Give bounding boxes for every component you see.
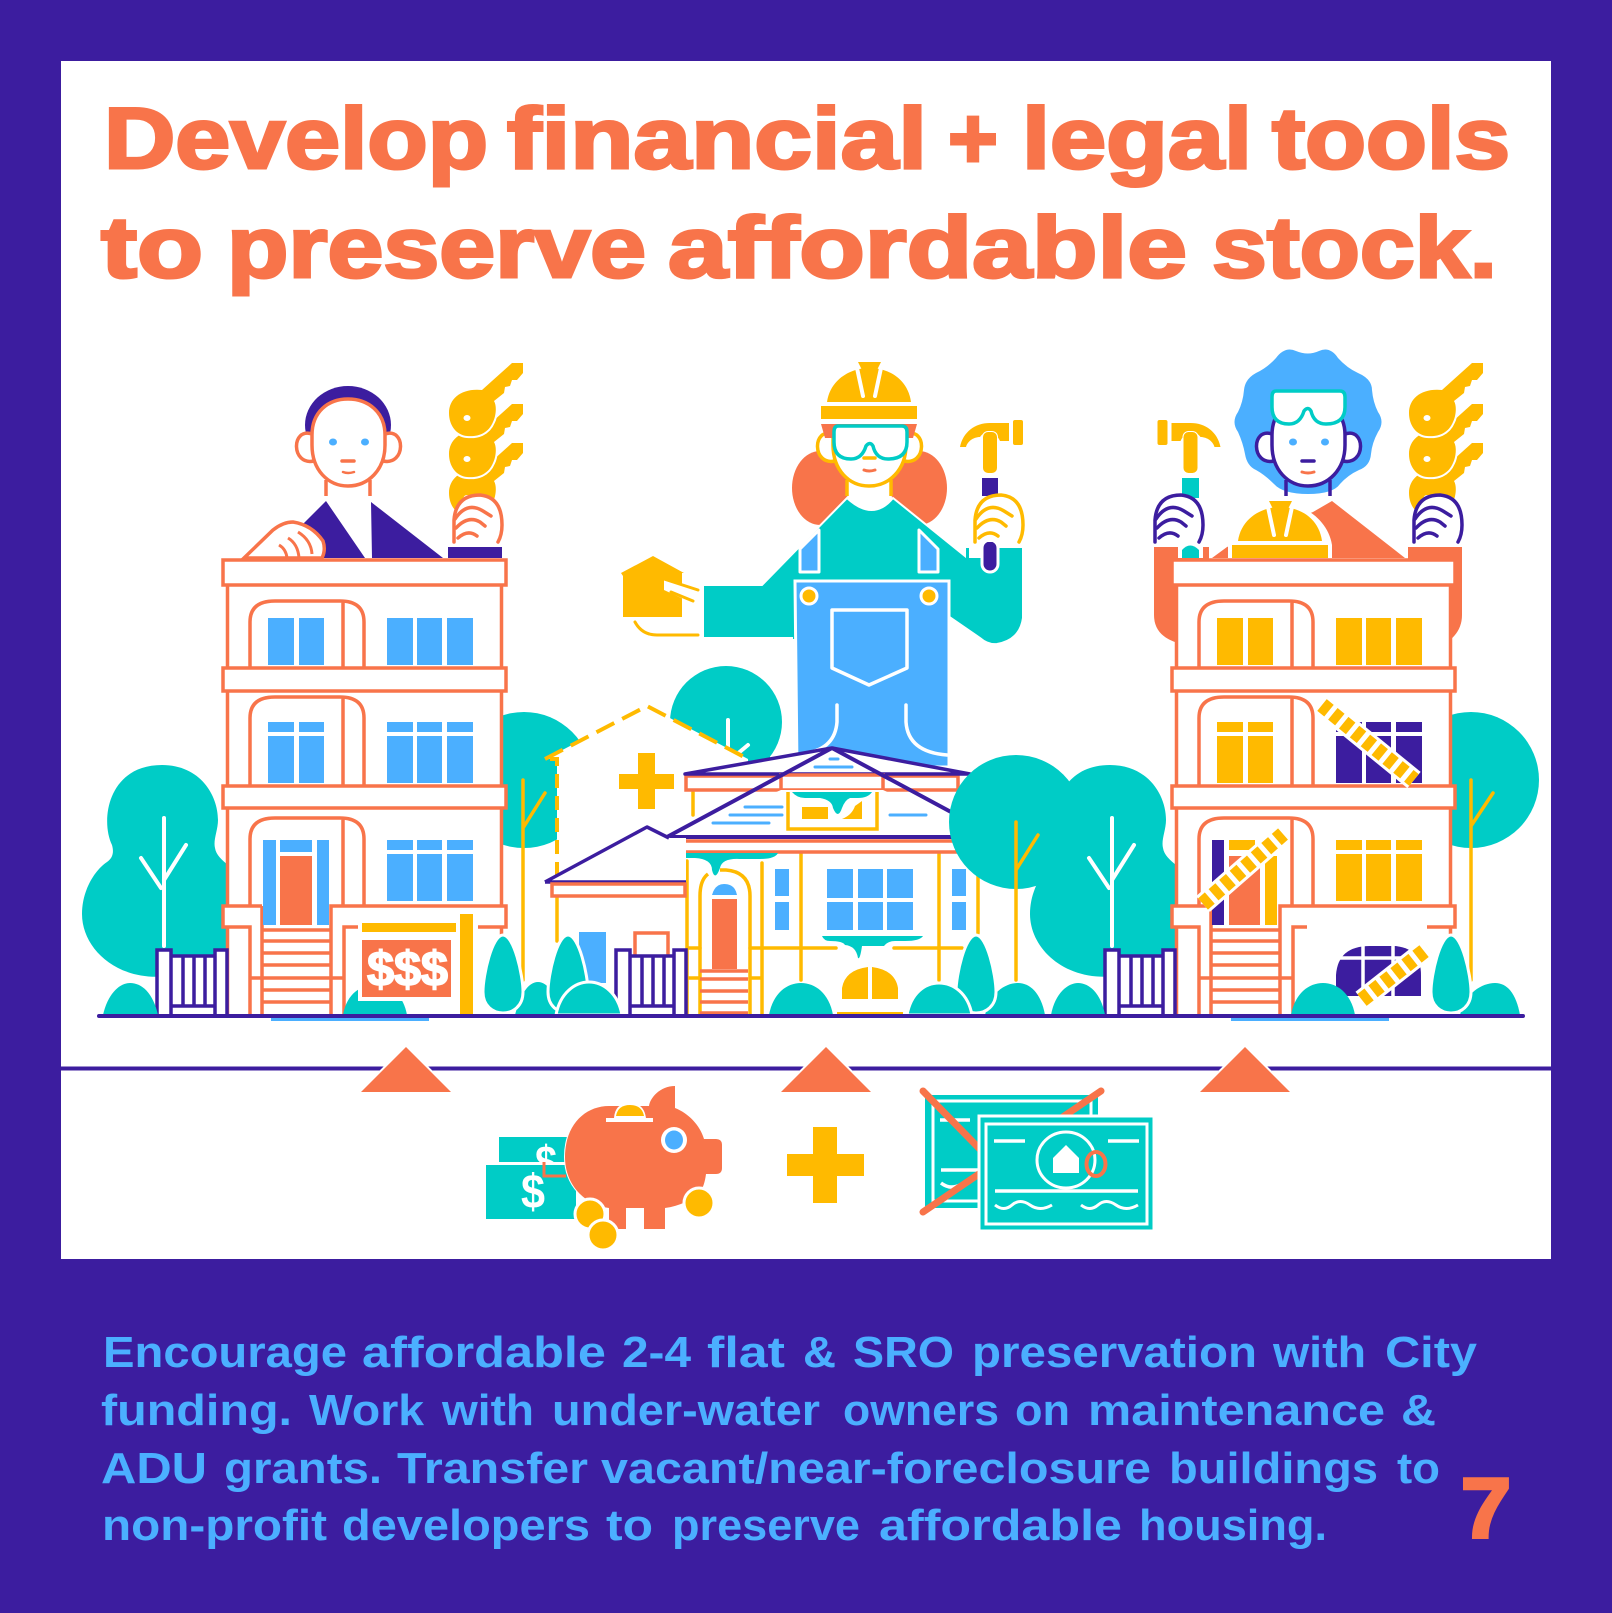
- garage window: [1336, 946, 1421, 996]
- windows: yellow: [1217, 618, 1422, 925]
- door: [1229, 856, 1260, 925]
- hammer: [960, 420, 1023, 473]
- body text: Transfer: [397, 1444, 588, 1493]
- back bill: [925, 1095, 1098, 1208]
- front bill: [979, 1116, 1154, 1231]
- head: [817, 399, 922, 496]
- icon: keys: [449, 363, 523, 516]
- hammer grip: [1178, 478, 1203, 558]
- left wing: [545, 827, 686, 896]
- icon: keys: [1409, 363, 1483, 516]
- title: stock.: [1212, 200, 1497, 296]
- dormer: [788, 792, 877, 829]
- hands: [1155, 495, 1462, 542]
- cross: [619, 753, 674, 809]
- body text: with: [441, 1386, 534, 1435]
- hard hat on roof: [1228, 501, 1332, 560]
- building: left: [223, 560, 506, 1016]
- title: +: [948, 91, 998, 187]
- title: preserve: [227, 200, 646, 296]
- body text: vacant/near-foreclosure: [601, 1444, 1151, 1493]
- overalls: [795, 530, 949, 767]
- sign: price: [343, 914, 473, 1016]
- body text: flat: [707, 1328, 785, 1377]
- hair: [305, 386, 391, 464]
- body text: 2-4: [622, 1328, 692, 1377]
- white panel: [61, 61, 1551, 1259]
- hair: [1234, 350, 1382, 494]
- head: [1256, 399, 1361, 496]
- sleeve: [448, 547, 502, 558]
- face: [329, 438, 369, 473]
- shirt and arms: [703, 498, 1023, 644]
- small door frame: [635, 933, 668, 957]
- arrows: up triangles: [361, 1047, 1290, 1092]
- tree: behind central house: [670, 666, 782, 790]
- page number: 7: [1461, 1461, 1511, 1555]
- windows: blue: [263, 618, 473, 925]
- body text: housing.: [1139, 1501, 1327, 1550]
- title: financial: [507, 91, 927, 187]
- body text: non-profit: [102, 1501, 327, 1550]
- moss under window: [822, 936, 923, 958]
- building: right: [1172, 560, 1455, 1016]
- body text: funding.: [101, 1386, 292, 1435]
- hair buns: [792, 451, 947, 525]
- body text: under-water: [552, 1386, 820, 1435]
- body text: &: [803, 1328, 836, 1377]
- cash: [486, 1136, 576, 1219]
- house: centre: [545, 748, 990, 1016]
- hair fringe: [821, 424, 917, 438]
- body text: grants.: [224, 1444, 382, 1493]
- mouth: [864, 458, 875, 471]
- title: Develop: [104, 91, 488, 187]
- body text: preservation: [972, 1328, 1257, 1377]
- pig: [565, 1086, 722, 1229]
- arched basement window: [842, 967, 898, 999]
- icon: small house in hand: [621, 556, 699, 635]
- lower roof: [667, 748, 990, 852]
- body text: to: [1397, 1444, 1440, 1493]
- forehead cover: [825, 396, 915, 424]
- tree: left of left building: [82, 765, 228, 977]
- tree: left of right building: [1030, 765, 1176, 977]
- sleeves: [1154, 547, 1462, 643]
- door: [280, 856, 312, 925]
- tree: right of central house: [949, 755, 1083, 980]
- body text: ADU: [101, 1444, 207, 1493]
- tail: [544, 1162, 566, 1176]
- title: legal: [1022, 91, 1252, 187]
- body text: maintenance: [1088, 1386, 1385, 1435]
- title: [101, 91, 1510, 296]
- moss under eaves: [678, 853, 778, 876]
- hammer grip: [969, 478, 998, 572]
- goggles: [1272, 391, 1345, 424]
- upper roof: [685, 748, 970, 790]
- body text: Encourage: [103, 1328, 347, 1377]
- body text: SRO: [853, 1328, 954, 1377]
- roof shingle lines: [713, 759, 926, 823]
- body text: on: [1015, 1386, 1070, 1435]
- body text: City: [1385, 1328, 1478, 1377]
- title: to: [101, 200, 203, 296]
- facade: [687, 852, 979, 1016]
- scaffolding: [557, 792, 978, 1015]
- hand holding keys: [454, 495, 502, 542]
- body text: developers: [342, 1501, 590, 1550]
- hand holding hammer: [975, 495, 1023, 542]
- buttons: [801, 588, 937, 604]
- person: right, with blue hair: [1154, 350, 1483, 643]
- windows: [579, 869, 966, 983]
- body text: affordable: [879, 1501, 1122, 1550]
- torso: [1212, 501, 1405, 558]
- icon: piggy bank with cash: [486, 1086, 722, 1250]
- face: [1289, 438, 1329, 473]
- body text: owners: [843, 1386, 999, 1435]
- front door: [700, 870, 750, 1015]
- caution tape: upper: [1322, 705, 1414, 780]
- porch stairs: [700, 971, 748, 1013]
- body text: with: [1272, 1328, 1366, 1377]
- body text: buildings: [1169, 1444, 1378, 1493]
- person: left, in a suit with keys: [244, 363, 523, 558]
- cash: $: [521, 1166, 545, 1219]
- fences: [157, 950, 1175, 1016]
- body text: affordable: [362, 1328, 606, 1377]
- caution tape: garage: [1362, 948, 1428, 1000]
- body text: to: [606, 1501, 653, 1550]
- pocket: [832, 610, 907, 685]
- body text: &: [1401, 1386, 1436, 1435]
- cash: $: [535, 1136, 557, 1188]
- title: affordable: [668, 200, 1187, 296]
- icon: crossed bill and grant bill: [923, 1091, 1154, 1231]
- hammer: [1158, 420, 1220, 473]
- divider line: [61, 1066, 1551, 1070]
- ground line: [99, 1016, 1523, 1021]
- goggles: [834, 426, 907, 459]
- plus sign: [787, 1127, 864, 1203]
- hard hat: [821, 362, 917, 419]
- bushes: [103, 935, 1520, 1015]
- sign: price: $$$: [367, 943, 448, 997]
- body text: Work: [309, 1386, 425, 1435]
- title: tools: [1272, 91, 1510, 187]
- windows: boarded purple: [1212, 722, 1422, 925]
- body text: [101, 1328, 1478, 1550]
- dashed planned house: [545, 706, 748, 900]
- tree: behind left building: [456, 712, 592, 980]
- tree: right of right building: [1403, 712, 1539, 980]
- coins: [575, 1188, 714, 1250]
- body text: preserve: [672, 1501, 860, 1550]
- cross out: [923, 1091, 1101, 1212]
- person: centre, in overalls: [621, 362, 1023, 767]
- suit: [300, 501, 443, 558]
- hand on roof: [244, 522, 324, 558]
- caution tape: door: [1203, 834, 1283, 904]
- head: [296, 399, 401, 496]
